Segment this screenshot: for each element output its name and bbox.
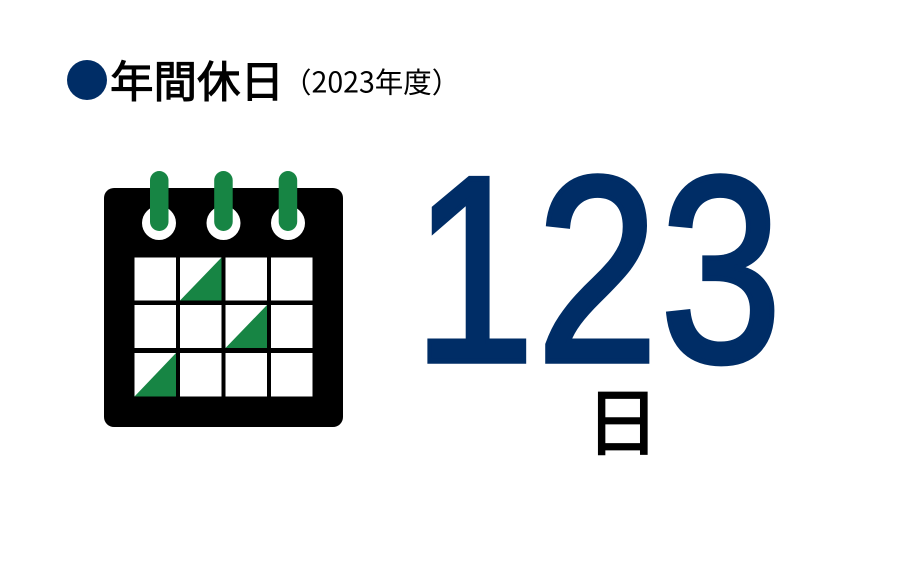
big number: 123: 123 [413,122,782,418]
unit: days: 日 [586,365,659,471]
binding rings [150,171,297,231]
calendar body [104,188,343,427]
heading note: fiscal year: （2023年度） [283,60,460,102]
date grid [134,258,312,396]
highlighted holidays [134,258,267,396]
heading: annual holidays: 年間休日 [110,48,284,110]
binding holes [142,206,305,240]
icon: calendar [104,171,343,427]
heading bullet [67,60,107,100]
